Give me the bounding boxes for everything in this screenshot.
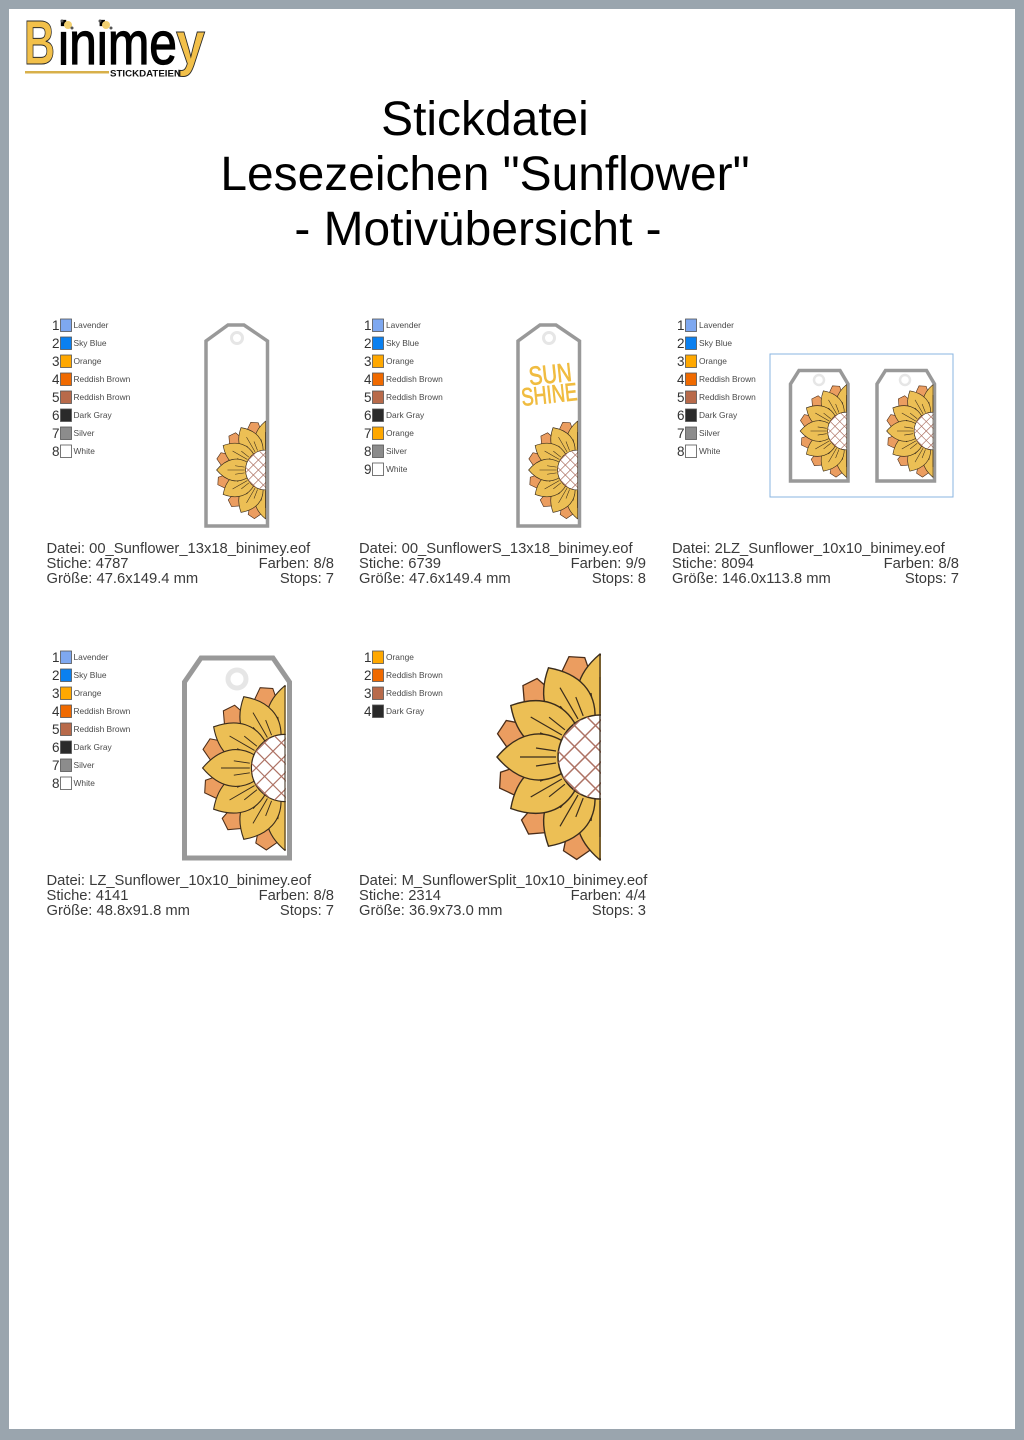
colour legend: Reddish Brown	[74, 724, 131, 734]
file info: Farben: 8/8	[259, 556, 334, 572]
colour legend: Reddish Brown	[386, 688, 443, 698]
colour legend: 5	[364, 390, 372, 405]
file info: Stiche: 2314	[359, 888, 441, 904]
colour legend: White	[699, 446, 721, 456]
file info: Stiche: 4787	[46, 556, 129, 572]
file info: Farben: 9/9	[571, 556, 646, 572]
file info: Stops: 3	[592, 903, 646, 919]
colour legend: 1	[52, 650, 60, 665]
bookmark with sunflower	[206, 325, 285, 526]
file info: Stops: 7	[280, 571, 334, 587]
colour legend: 6	[52, 408, 60, 423]
colour legend: Reddish Brown	[699, 392, 756, 402]
hoop frame with two tags	[770, 354, 953, 497]
file info	[46, 541, 334, 587]
colour legend: 8	[52, 444, 60, 459]
colour legend: Reddish Brown	[74, 706, 131, 716]
colour legend: Dark Gray	[74, 742, 112, 752]
colour legend: 5	[52, 390, 60, 405]
colour legend: Reddish Brown	[386, 392, 443, 402]
colour legend: Dark Gray	[386, 410, 425, 420]
panel: LZ_Sunflower_10x10	[46, 650, 334, 919]
colour legend: 2	[52, 668, 60, 683]
file info: Stiche: 8094	[672, 556, 754, 572]
colour legend: Reddish Brown	[699, 374, 756, 384]
colour legend: 2	[364, 668, 372, 683]
colour legend: 4	[52, 704, 60, 719]
bookmark with SUN SHINE lettering and sunflower: SUN	[527, 357, 573, 391]
colour legend: Dark Gray	[699, 410, 738, 420]
file info: Stops: 8	[592, 571, 646, 587]
file info: Stops: 7	[905, 571, 959, 587]
colour legend: 4	[52, 372, 60, 387]
panel: 2LZ_Sunflower_10x10	[672, 318, 959, 587]
colour legend: 3	[52, 686, 60, 701]
file info: Größe: 48.8x91.8 mm	[46, 903, 190, 919]
split sunflower	[495, 649, 642, 865]
file info	[672, 541, 959, 587]
colour legend: Orange	[386, 356, 414, 366]
colour legend: 3	[364, 686, 372, 701]
file info: Stops: 7	[280, 903, 334, 919]
file info: Datei: 00_Sunflower_13x18_binimey.eof	[46, 541, 311, 557]
colour legend: 8	[52, 776, 60, 791]
colour legend	[52, 650, 131, 791]
colour legend: Orange	[386, 652, 414, 662]
colour legend: Lavender	[74, 652, 109, 662]
colour legend: Lavender	[74, 320, 109, 330]
colour legend: White	[386, 464, 408, 474]
title: - Motivübersicht -	[294, 203, 662, 256]
colour legend: 8	[364, 444, 372, 459]
colour legend: 4	[364, 704, 372, 719]
colour legend: Sky Blue	[699, 338, 732, 348]
colour legend: Orange	[74, 356, 102, 366]
colour legend: Reddish Brown	[74, 392, 131, 402]
colour legend: 5	[677, 390, 685, 405]
colour legend: 1	[364, 318, 372, 333]
logo: Binimey Stickdateien: B	[24, 9, 55, 78]
colour legend: 4	[364, 372, 372, 387]
colour legend: 6	[364, 408, 372, 423]
file info	[359, 873, 648, 919]
colour legend: 4	[677, 372, 685, 387]
colour legend: 7	[52, 758, 60, 773]
colour legend: 3	[52, 354, 60, 369]
colour legend: 6	[52, 740, 60, 755]
file info: Größe: 47.6x149.4 mm	[46, 571, 198, 587]
colour legend: 2	[364, 336, 372, 351]
colour legend: 2	[52, 336, 60, 351]
colour legend: White	[74, 778, 95, 788]
file info: Größe: 146.0x113.8 mm	[672, 571, 831, 587]
file info: Farben: 8/8	[259, 888, 334, 904]
colour legend: Silver	[74, 760, 95, 770]
colour legend	[52, 318, 131, 459]
colour legend: Sky Blue	[386, 338, 419, 348]
colour legend: 3	[364, 354, 372, 369]
tag with sunflower	[184, 658, 319, 858]
file info: Datei: M_SunflowerSplit_10x10_binimey.eof	[359, 873, 648, 889]
file info: Datei: 00_SunflowerS_13x18_binimey.eof	[359, 541, 633, 557]
colour legend: Silver	[386, 446, 407, 456]
colour legend: Sky Blue	[74, 670, 107, 680]
colour legend: 7	[52, 426, 60, 441]
colour legend	[364, 650, 443, 719]
file info: Stiche: 6739	[359, 556, 441, 572]
colour legend: 8	[677, 444, 685, 459]
logo: Binimey Stickdateien: y	[176, 10, 206, 77]
colour legend: 3	[677, 354, 685, 369]
colour legend: Reddish Brown	[74, 374, 131, 384]
file info: Größe: 47.6x149.4 mm	[359, 571, 511, 587]
file info: Größe: 36.9x73.0 mm	[359, 903, 502, 919]
file info: Farben: 8/8	[884, 556, 959, 572]
file info: Datei: 2LZ_Sunflower_10x10_binimey.eof	[672, 541, 946, 557]
colour legend: Lavender	[699, 320, 734, 330]
colour legend: Orange	[699, 356, 727, 366]
file info	[46, 873, 334, 919]
colour legend: 1	[52, 318, 60, 333]
logo: Binimey Stickdateien: STICKDATEIEN	[110, 68, 181, 80]
colour legend: White	[74, 446, 95, 456]
colour legend: 1	[364, 650, 372, 665]
colour legend: 2	[677, 336, 685, 351]
colour legend: 1	[677, 318, 685, 333]
colour legend: Dark Gray	[386, 706, 425, 716]
title: Lesezeichen "Sunflower"	[220, 148, 750, 201]
colour legend: Sky Blue	[74, 338, 107, 348]
colour legend: Dark Gray	[74, 410, 112, 420]
colour legend: 5	[52, 722, 60, 737]
colour legend: Reddish Brown	[386, 374, 443, 384]
colour legend: 7	[364, 426, 372, 441]
logo: Binimey Stickdateien: inime	[58, 10, 177, 77]
panel: 00_Sunflower_13x18	[46, 318, 334, 587]
bookmark with SUN SHINE lettering and sunflower: SHINE	[520, 378, 579, 412]
colour legend: Silver	[74, 428, 95, 438]
colour legend	[677, 318, 756, 459]
title	[220, 93, 750, 256]
colour legend: Orange	[386, 428, 414, 438]
file info: Datei: LZ_Sunflower_10x10_binimey.eof	[46, 873, 312, 889]
file info	[359, 541, 646, 587]
bookmark with SUN SHINE lettering and sunflower	[518, 325, 597, 526]
file info: Farben: 4/4	[571, 888, 646, 904]
panel: M_SunflowerSplit_10x10	[359, 649, 648, 919]
colour legend: 7	[677, 426, 685, 441]
colour legend	[364, 318, 443, 477]
colour legend: 9	[364, 462, 372, 477]
file info: Stiche: 4141	[46, 888, 129, 904]
colour legend: Orange	[74, 688, 102, 698]
colour legend: Lavender	[386, 320, 421, 330]
colour legend: 6	[677, 408, 685, 423]
colour legend: Silver	[699, 428, 720, 438]
title: Stickdatei	[381, 93, 589, 146]
colour legend: Reddish Brown	[386, 670, 443, 680]
panel: 00_SunflowerS_13x18	[359, 318, 646, 587]
